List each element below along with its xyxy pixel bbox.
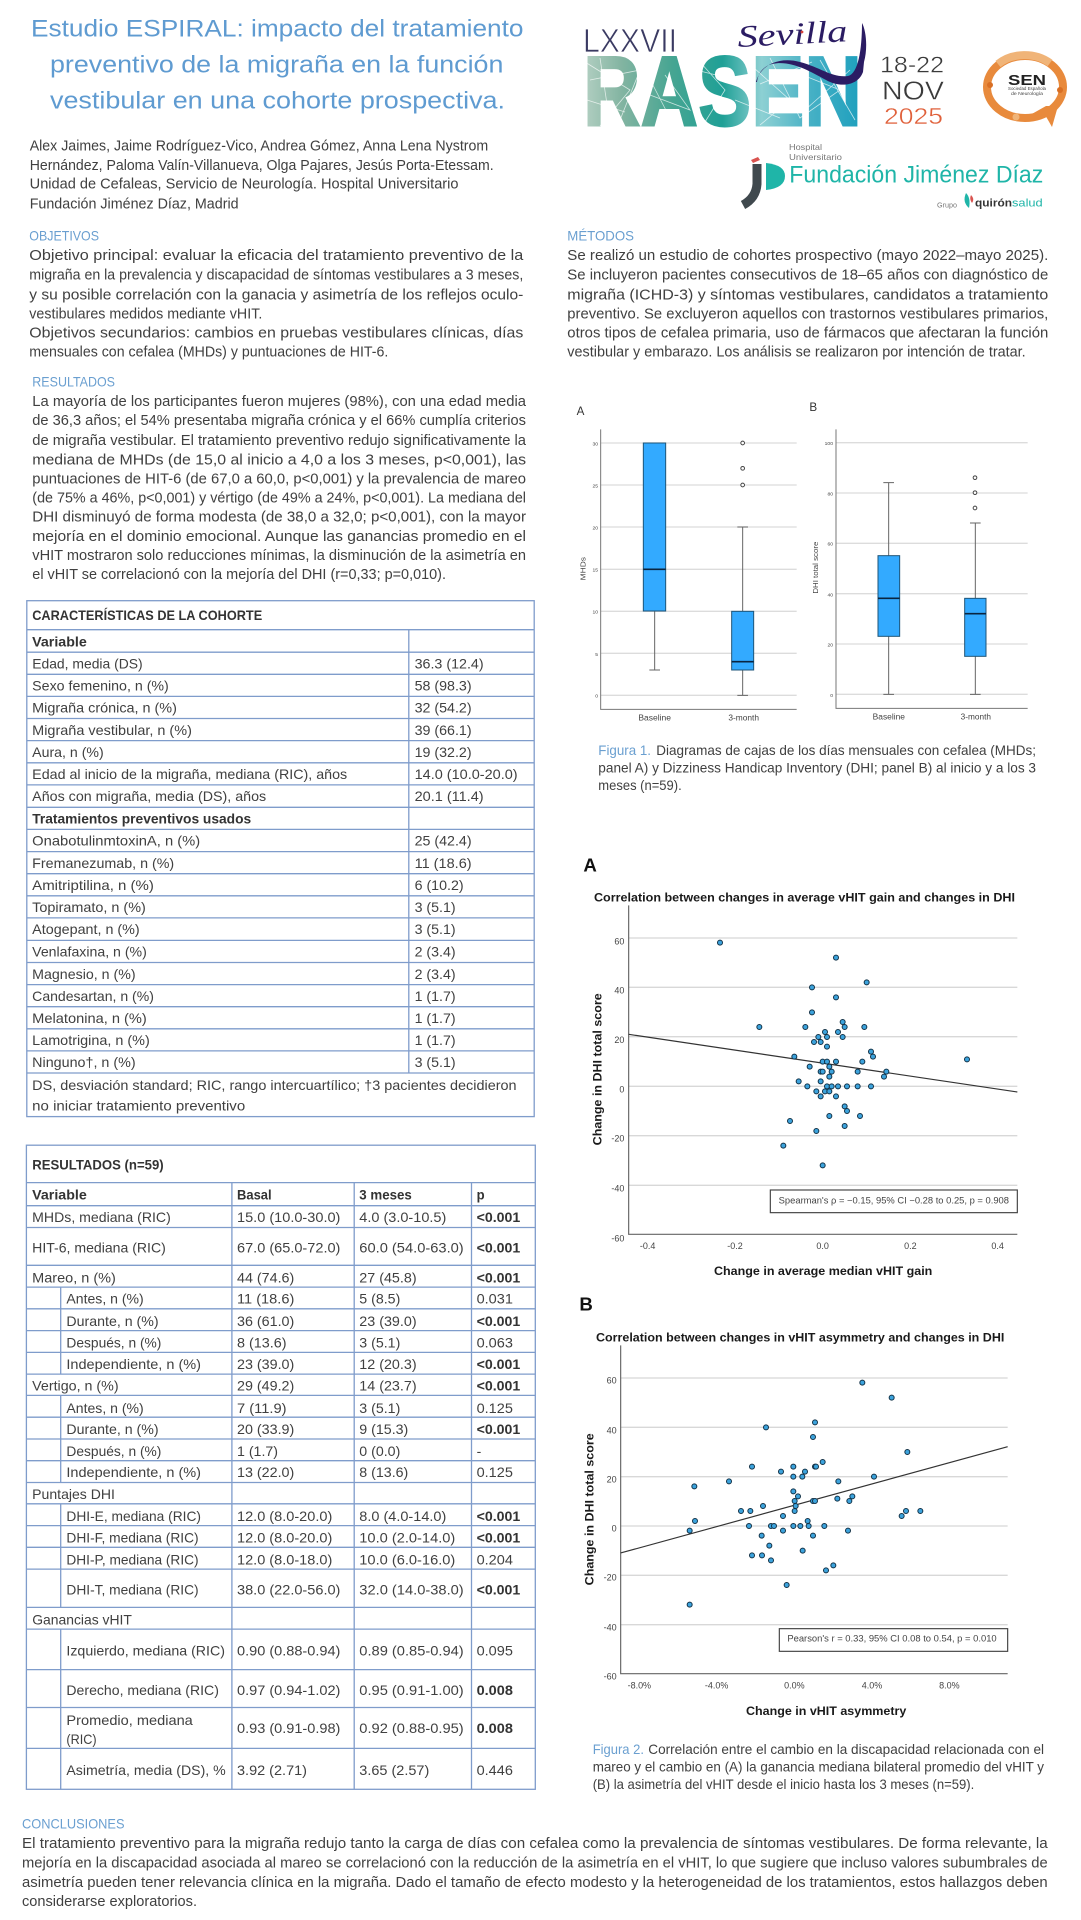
results table header: p	[477, 1187, 485, 1203]
panel: conclusiones: asimetría pueden tener relevancia clínica en la migraña. Dado el tamaño de efecto modesto y la heterogeneidad de los tratamientos, estos hallazgos deben	[22, 1875, 1048, 1891]
results table body: Durante, n (%)	[66, 1421, 159, 1437]
results table body: Antes, n (%)	[66, 1400, 144, 1416]
panel: resultados text: de 36,3 años; el 54% presentaba migraña crónica y el 66% cumplía criterios	[32, 413, 526, 429]
results table body: 12 (20.3)	[359, 1356, 417, 1372]
panel: conclusiones	[22, 1816, 1049, 1910]
chart: scatter A: -0.4	[640, 1241, 655, 1251]
results table body: 4.0 (3.0-10.5)	[359, 1209, 446, 1225]
results table body: 29 (49.2)	[237, 1378, 294, 1394]
boxplot panel B: Baseline	[873, 713, 906, 722]
logo dates: 18-22	[880, 52, 944, 78]
table body rows: Amitriptilina, n (%)	[32, 877, 154, 893]
results table body: <0.001	[477, 1239, 521, 1255]
panel: conclusiones: CONCLUSIONES	[22, 1816, 124, 1832]
panel: métodos: vestibular y embarazo. Los análisis se realizaron por intención de tratar.	[567, 344, 1026, 360]
boxplot panel A: 20	[592, 525, 598, 531]
panel: resultados text	[32, 374, 527, 583]
caption: figura 2	[593, 1741, 1044, 1792]
caption: figura 1: panel A) y Dizziness Handicap Inventory (DHI; panel B) al inicio y a los 3	[598, 760, 1036, 776]
table body rows: 58 (98.3)	[415, 678, 472, 694]
chart: scatter A: Change in average median vHIT gain	[714, 1264, 932, 1278]
results table body: 1 (1.7)	[237, 1443, 278, 1459]
results table body: Vertigo, n (%)	[32, 1378, 119, 1394]
results table body: 0.063	[477, 1335, 513, 1351]
logo: Fundación Jiménez Díaz: quirón	[975, 198, 1012, 210]
boxplot panel A: Baseline	[638, 714, 672, 723]
chart: scatter B: -8.0%	[628, 1680, 651, 1690]
results table header: Variable	[32, 1187, 87, 1203]
results table body: 32.0 (14.0-38.0)	[359, 1581, 464, 1597]
boxplot panel B: DHI total score	[811, 542, 820, 594]
chart: scatter A: 0	[619, 1084, 624, 1094]
table body rows: Atogepant, n (%)	[32, 921, 140, 937]
results table body: 0.89 (0.85-0.94)	[359, 1643, 464, 1659]
results table body: Derecho, mediana (RIC)	[66, 1682, 219, 1698]
logo: Fundación Jiménez Díaz: Universitario	[789, 152, 842, 162]
boxplot panel A: 3-month	[728, 714, 759, 723]
results table body: -	[477, 1443, 482, 1459]
caption: figura 2: Correlación entre el cambio en la discapacidad relacionada con el	[648, 1741, 1044, 1757]
chart: scatter B: -60	[604, 1672, 617, 1682]
authors and affiliation: Hernández, Paloma Valín-Villanueva, Olga Pajares, Jesús Porta-Etessam.	[30, 158, 494, 174]
logo: Fundación Jiménez Díaz: salud	[1012, 198, 1043, 210]
chart: scatter B: 0	[612, 1524, 617, 1534]
results table body: 8 (13.6)	[359, 1464, 408, 1480]
results table body: <0.001	[477, 1313, 521, 1329]
panel: objetivos: Objetivos secundarios: cambios en pruebas vestibulares clínicas, días	[29, 325, 523, 341]
results table body: 0.095	[477, 1643, 513, 1659]
logo: Fundación Jiménez Díaz: Hospital	[789, 142, 822, 152]
results table body: <0.001	[477, 1508, 521, 1524]
table body rows: 3 (5.1)	[415, 899, 456, 915]
title: preventivo de la migraña en la función	[50, 52, 503, 79]
logo: Fundación Jiménez Díaz: Grupo	[937, 203, 957, 210]
title: vestibular en una cohorte prospectiva.	[50, 87, 505, 114]
chart: scatter A	[583, 855, 1017, 1278]
table body rows: Años con migraña, media (DS), años	[32, 788, 266, 804]
table body rows: Variable	[32, 633, 87, 649]
panel: resultados text: mejoría en el dominio emocional. Aunque las ganancias promedio en el	[32, 529, 526, 545]
results table body: 0.95 (0.91-1.00)	[359, 1682, 464, 1698]
authors and affiliation: Fundación Jiménez Díaz, Madrid	[30, 196, 239, 212]
chart: scatter A: 0.4	[991, 1241, 1004, 1251]
results table body: 9 (15.3)	[359, 1421, 408, 1437]
results table body: 11 (18.6)	[237, 1291, 294, 1307]
results table body: 8.0 (4.0-14.0)	[359, 1508, 446, 1524]
panel: objetivos: Objetivo principal: evaluar la eficacia del tratamiento preventivo de la	[29, 248, 524, 264]
panel: conclusiones: El tratamiento preventivo para la migraña redujo tanto la carga de días con cefalea como la prevalencia de síntomas vestibulares. De forma relevante, la	[22, 1836, 1049, 1852]
panel: métodos: otros tipos de cefalea primaria, uso de fármacos que afectaran la función	[567, 325, 1048, 341]
results table body: 3.65 (2.57)	[359, 1762, 429, 1778]
panel: resultados text: el vHIT se correlacionó con la mejoría del DHI (r=0,33; p=0,010).	[32, 567, 446, 583]
boxplot panel A	[577, 405, 797, 723]
panel: métodos: Se realizó un estudio de cohortes prospectivo (mayo 2022–mayo 2025).	[567, 248, 1048, 264]
panel: resultados text: RESULTADOS	[32, 374, 115, 390]
table body rows: Ninguno†, n (%)	[32, 1054, 136, 1070]
results table body: DHI-P, mediana (RIC)	[66, 1551, 199, 1567]
results table body: Izquierdo, mediana (RIC)	[66, 1643, 225, 1659]
chart: scatter A: 20	[614, 1035, 624, 1045]
table: resultados n=59	[26, 1145, 535, 1789]
table body rows: Melatonina, n (%)	[32, 1010, 147, 1026]
results table body: Promedio, mediana	[66, 1712, 193, 1728]
boxplot panel A: 10	[592, 609, 598, 615]
results table body: 38.0 (22.0-56.0)	[237, 1581, 340, 1597]
chart: scatter B: 60	[607, 1376, 617, 1386]
authors and affiliation: Unidad de Cefaleas, Servicio de Neurología. Hospital Universitario	[30, 177, 458, 193]
results table body: MHDs, mediana (RIC)	[32, 1209, 171, 1225]
logo: SEN: Sociedad Española	[1008, 86, 1046, 91]
results table body: 23 (39.0)	[237, 1356, 294, 1372]
panel: objetivos: OBJETIVOS	[29, 228, 99, 244]
results table body: Independiente, n (%)	[66, 1356, 201, 1372]
chart: scatter B: -4.0%	[705, 1680, 728, 1690]
table body rows: 1 (1.7)	[415, 1010, 456, 1026]
chart: scatter A: 60	[614, 936, 624, 946]
results table body: 3 (5.1)	[359, 1400, 400, 1416]
panel: resultados text: vHIT mostraron solo reducciones mínimas, la disminución de la asimetría en	[32, 548, 526, 564]
results table body: 12.0 (8.0-20.0)	[237, 1508, 332, 1524]
panel: resultados text: puntuaciones de HIT-6 (de 67,0 a 60,0, p<0,001) y la prevalencia de mareo	[32, 471, 526, 487]
logo: LXXVII RASEN Sevilla: LXXVII	[583, 22, 677, 59]
chart: scatter B	[579, 1294, 1008, 1718]
results table body: <0.001	[477, 1378, 521, 1394]
caption: figura 2: Figura 2.	[593, 1741, 644, 1757]
caption: figura 2: mareo y el cambio en (A) la ganancia mediana bilateral promedio del vHIT y	[593, 1759, 1044, 1775]
panel: métodos: MÉTODOS	[567, 228, 634, 244]
panel: resultados text: (de 75% a 46%, p<0,001) y vértigo (de 49% a 24%, p<0,001). La mediana del	[32, 490, 526, 506]
results table title: RESULTADOS (n=59)	[32, 1157, 164, 1173]
boxplot panel B: 80	[827, 491, 833, 497]
logo: Fundación Jiménez Díaz	[743, 142, 1043, 210]
boxplot panel B: 100	[825, 441, 833, 447]
results table body: Ganancias vHIT	[32, 1611, 132, 1627]
title	[31, 16, 524, 114]
chart: scatter A: Correlation between changes in average vHIT gain and changes in DHI	[594, 891, 1015, 905]
results table body: 3 (5.1)	[359, 1335, 400, 1351]
caption: figura 2: (B) la asimetría del vHIT desde el inicio hasta los 3 meses (n=59).	[593, 1776, 974, 1792]
results table body: 12.0 (8.0-18.0)	[237, 1551, 332, 1567]
results table body: 0.008	[477, 1720, 513, 1736]
boxplot panel B: B	[809, 401, 817, 414]
chart: scatter B: Correlation between changes in vHIT asymmetry and changes in DHI	[596, 1331, 1004, 1345]
table body rows: 39 (66.1)	[415, 722, 472, 738]
results table body: 23 (39.0)	[359, 1313, 417, 1329]
table footnote	[32, 1077, 517, 1114]
panel: conclusiones: considerarse exploratorios.	[22, 1894, 197, 1910]
table body rows: Candesartan, n (%)	[32, 988, 154, 1004]
results table body: Después, n (%)	[66, 1335, 161, 1351]
results table body: <0.001	[477, 1209, 521, 1225]
boxplot panel A: 30	[592, 441, 598, 447]
results table body: Mareo, n (%)	[32, 1269, 116, 1285]
boxplot panel B: 0	[830, 693, 833, 699]
table body rows: Edad al inicio de la migraña, mediana (RIC), años	[32, 766, 347, 782]
results table body: 0.93 (0.91-0.98)	[237, 1720, 340, 1736]
table body rows: 3 (5.1)	[415, 1054, 456, 1070]
table footnote: DS, desviación standard; RIC, rango intercuartílico; †3 pacientes decidieron	[32, 1077, 517, 1093]
results table body: 14 (23.7)	[359, 1378, 417, 1394]
chart: scatter B: B	[579, 1294, 593, 1315]
table body rows: Migraña vestibular, n (%)	[32, 722, 192, 738]
table body rows: Migraña crónica, n (%)	[32, 700, 177, 716]
results table body: 7 (11.9)	[237, 1400, 286, 1416]
table body rows: 11 (18.6)	[415, 855, 472, 871]
logo: LXXVII RASEN Sevilla: RASEN	[583, 36, 862, 146]
panel: resultados text: DHI disminuyó de forma modesta (de 38,0 a 32,0; p<0,001), con la mayor	[32, 509, 526, 525]
table body rows: Edad, media (DS)	[32, 656, 143, 672]
results table body: Asimetría, media (DS), %	[66, 1762, 226, 1778]
results table body: 5 (8.5)	[359, 1291, 400, 1307]
panel: objetivos: mensuales con cefalea (MHDs) y puntuaciones de HIT-6.	[29, 344, 388, 360]
boxplot panel B: 60	[827, 542, 833, 548]
authors and affiliation: Alex Jaimes, Jaime Rodríguez-Vico, Andrea Gómez, Anna Lena Nystrom	[30, 139, 488, 155]
chart: scatter B: 4.0%	[862, 1680, 882, 1690]
table body rows: Fremanezumab, n (%)	[32, 855, 174, 871]
table body rows: 2 (3.4)	[415, 966, 456, 982]
boxplot panel A: 25	[592, 484, 598, 490]
results table body: DHI-E, mediana (RIC)	[66, 1508, 201, 1524]
results table body: <0.001	[477, 1581, 521, 1597]
panel: métodos: preventivo. Se excluyeron aquellos con trastornos vestibulares primarios,	[567, 306, 1048, 322]
chart: scatter B: -40	[604, 1622, 617, 1632]
table body rows: 1 (1.7)	[415, 988, 456, 1004]
table body rows: Topiramato, n (%)	[32, 899, 146, 915]
results table body: <0.001	[477, 1421, 521, 1437]
chart: scatter B: Change in DHI total score	[582, 1433, 596, 1585]
results table body: 0.125	[477, 1400, 513, 1416]
table body rows: 36.3 (12.4)	[415, 656, 484, 672]
table body rows: Tratamientos preventivos usados	[32, 811, 251, 827]
panel: objetivos	[29, 228, 524, 360]
results table body: 15.0 (10.0-30.0)	[237, 1209, 340, 1225]
table body rows: Venlafaxina, n (%)	[32, 944, 147, 960]
caption: figura 1	[598, 742, 1036, 793]
annotation: Pearson	[779, 1629, 1008, 1651]
results table body: DHI-F, mediana (RIC)	[66, 1530, 199, 1546]
results table body: 60.0 (54.0-63.0)	[359, 1239, 464, 1255]
boxplot panel B: 40	[827, 592, 833, 598]
results table header: Basal	[237, 1187, 272, 1203]
boxplot panel B: 3-month	[961, 713, 991, 722]
chart: scatter A: -40	[611, 1183, 624, 1193]
annotation: Spearman: Spearman's ρ = −0.15, 95% CI −0.28 to 0.25, p = 0.908	[779, 1195, 1009, 1205]
panel: objetivos: migraña en la prevalencia y discapacidad de síntomas vestibulares a 3 meses,	[29, 267, 523, 283]
panel: conclusiones: mejoría en la discapacidad asociada al mareo se correlacionó con la reducción de la asimetría en el vHIT, lo que sugiere que incluso valores subumbrales de	[22, 1855, 1048, 1871]
panel: resultados text: La mayoría de los participantes fueron mujeres (98%), con una edad media	[32, 394, 527, 410]
results table body: Antes, n (%)	[66, 1291, 144, 1307]
results table body: 0.031	[477, 1291, 513, 1307]
results table body	[32, 1209, 521, 1778]
logo: SEN	[987, 55, 1063, 127]
panel: métodos: Se incluyeron pacientes consecutivos de 18–65 años con diagnóstico de	[567, 267, 1048, 283]
table footnote: no iniciar tratamiento preventivo	[32, 1098, 245, 1114]
chart: scatter A: 0.2	[904, 1241, 917, 1251]
boxplot panel A: 15	[592, 567, 598, 573]
chart: scatter B: 20	[607, 1474, 617, 1484]
table body rows: OnabotulinmtoxinA, n (%)	[32, 833, 200, 849]
results table body: <0.001	[477, 1530, 521, 1546]
chart: scatter A: -60	[611, 1233, 624, 1243]
chart: scatter B: 0.0%	[784, 1680, 805, 1690]
results table body: DHI-T, mediana (RIC)	[66, 1581, 199, 1597]
table body rows: 1 (1.7)	[415, 1032, 456, 1048]
results table body: 0.97 (0.94-1.02)	[237, 1682, 340, 1698]
table body rows: 3 (5.1)	[415, 921, 456, 937]
results table body: 0.125	[477, 1464, 513, 1480]
chart: scatter A: 40	[614, 986, 624, 996]
chart: scatter A: -20	[611, 1134, 624, 1144]
panel: métodos	[567, 228, 1048, 360]
results table body: 0 (0.0)	[359, 1443, 400, 1459]
boxplot panel A: 5	[595, 652, 598, 658]
results table body: 44 (74.6)	[237, 1269, 294, 1285]
logo dates	[880, 52, 945, 129]
annotation: Spearman	[770, 1190, 1017, 1213]
chart: scatter B: 40	[607, 1426, 617, 1436]
table body rows: 2 (3.4)	[415, 944, 456, 960]
results table body: <0.001	[477, 1269, 521, 1285]
chart: boxplots figure 1	[577, 401, 1028, 723]
panel: objetivos: y su posible correlación con la ganacia y asimetría de los reflejos oculo-	[29, 287, 523, 303]
results table body: (RIC)	[66, 1731, 97, 1747]
results table body: 0.92 (0.88-0.95)	[359, 1720, 464, 1736]
table body rows	[32, 633, 518, 1070]
logo: Fundación Jiménez Díaz: Fundación Jiménez Díaz	[789, 162, 1043, 189]
table body rows: Magnesio, n (%)	[32, 966, 136, 982]
table body rows: 14.0 (10.0-20.0)	[415, 766, 518, 782]
results table body: HIT-6, mediana (RIC)	[32, 1239, 166, 1255]
table: características de la cohorte	[27, 601, 534, 1117]
boxplot panel A: MHDs	[579, 557, 588, 580]
table title: CARACTERÍSTICAS DE LA COHORTE	[32, 607, 262, 623]
logo: SEN: SEN	[1008, 72, 1046, 89]
logo: SEN: de Neurología	[1011, 91, 1044, 96]
results table body: 0.204	[477, 1551, 513, 1567]
results table body: Puntajes DHI	[32, 1486, 115, 1502]
results table body: Después, n (%)	[66, 1443, 161, 1459]
table body rows: 6 (10.2)	[415, 877, 464, 893]
results table body: 0.446	[477, 1762, 513, 1778]
results table body: Durante, n (%)	[66, 1313, 159, 1329]
title: Estudio ESPIRAL: impacto del tratamiento	[31, 16, 524, 43]
results table body: 13 (22.0)	[237, 1464, 294, 1480]
results table body: 67.0 (65.0-72.0)	[237, 1239, 340, 1255]
chart: scatter A: Change in DHI total score	[590, 993, 604, 1145]
results table body: 27 (45.8)	[359, 1269, 417, 1285]
chart: scatter B: -20	[604, 1573, 617, 1583]
panel: resultados text: de migraña vestibular. El tratamiento preventivo redujo significativamente la	[32, 433, 527, 449]
logo: LXXVII RASEN Sevilla: Sevilla	[737, 13, 848, 54]
boxplot panel A: A	[577, 405, 585, 418]
chart: scatter A: 0.0	[816, 1241, 829, 1251]
table body rows: Aura, n (%)	[32, 744, 104, 760]
chart: scatter A: A	[583, 855, 597, 876]
annotation: Pearson: Pearson's r = 0.33, 95% CI 0.08 to 0.54, p = 0.010	[787, 1634, 997, 1644]
table body rows: 25 (42.4)	[415, 833, 472, 849]
boxplot panel B	[809, 401, 1028, 722]
results table body: Independiente, n (%)	[66, 1464, 201, 1480]
logo dates: NOV	[882, 75, 945, 105]
chart: scatter B: 8.0%	[939, 1680, 960, 1690]
results table body: 36 (61.0)	[237, 1313, 294, 1329]
results table body: 10.0 (2.0-14.0)	[359, 1530, 455, 1546]
results table body: 12.0 (8.0-20.0)	[237, 1530, 332, 1546]
table body rows: 32 (54.2)	[415, 700, 472, 716]
authors and affiliation	[30, 139, 494, 212]
results table header	[32, 1187, 485, 1203]
results table body: <0.001	[477, 1356, 521, 1372]
table body rows: 19 (32.2)	[415, 744, 472, 760]
results table body: 3.92 (2.71)	[237, 1762, 307, 1778]
results table body: 0.90 (0.88-0.94)	[237, 1643, 340, 1659]
caption: figura 1: Diagramas de cajas de los días mensuales con cefalea (MHDs;	[656, 742, 1036, 758]
panel: resultados text: mediana de MHDs (de 15,0 al inicio a 4,0 a los 3 meses, p<0,001), las	[32, 452, 526, 468]
table body rows: Lamotrigina, n (%)	[32, 1032, 150, 1048]
results table body: 20 (33.9)	[237, 1421, 294, 1437]
table body rows: 20.1 (11.4)	[415, 788, 484, 804]
caption: figura 1: meses (n=59).	[598, 777, 682, 793]
boxplot panel B: 20	[827, 642, 833, 648]
caption: figura 1: Figura 1.	[598, 742, 651, 758]
chart: scatter B: Change in vHIT asymmetry	[746, 1704, 906, 1718]
boxplot panel A: 0	[595, 694, 598, 700]
chart: scatter A: -0.2	[727, 1241, 743, 1251]
results table body: 0.008	[477, 1682, 513, 1698]
results table header: 3 meses	[359, 1187, 412, 1203]
table body rows: Sexo femenino, n (%)	[32, 678, 169, 694]
logo dates: 2025	[884, 103, 943, 129]
panel: métodos: migraña (ICHD-3) y síntomas vestibulares, candidatos a tratamiento	[567, 287, 1048, 303]
results table body: 10.0 (6.0-16.0)	[359, 1551, 455, 1567]
results table body: 8 (13.6)	[237, 1335, 286, 1351]
panel: objetivos: vestibulares medidos mediante vHIT.	[29, 306, 262, 322]
